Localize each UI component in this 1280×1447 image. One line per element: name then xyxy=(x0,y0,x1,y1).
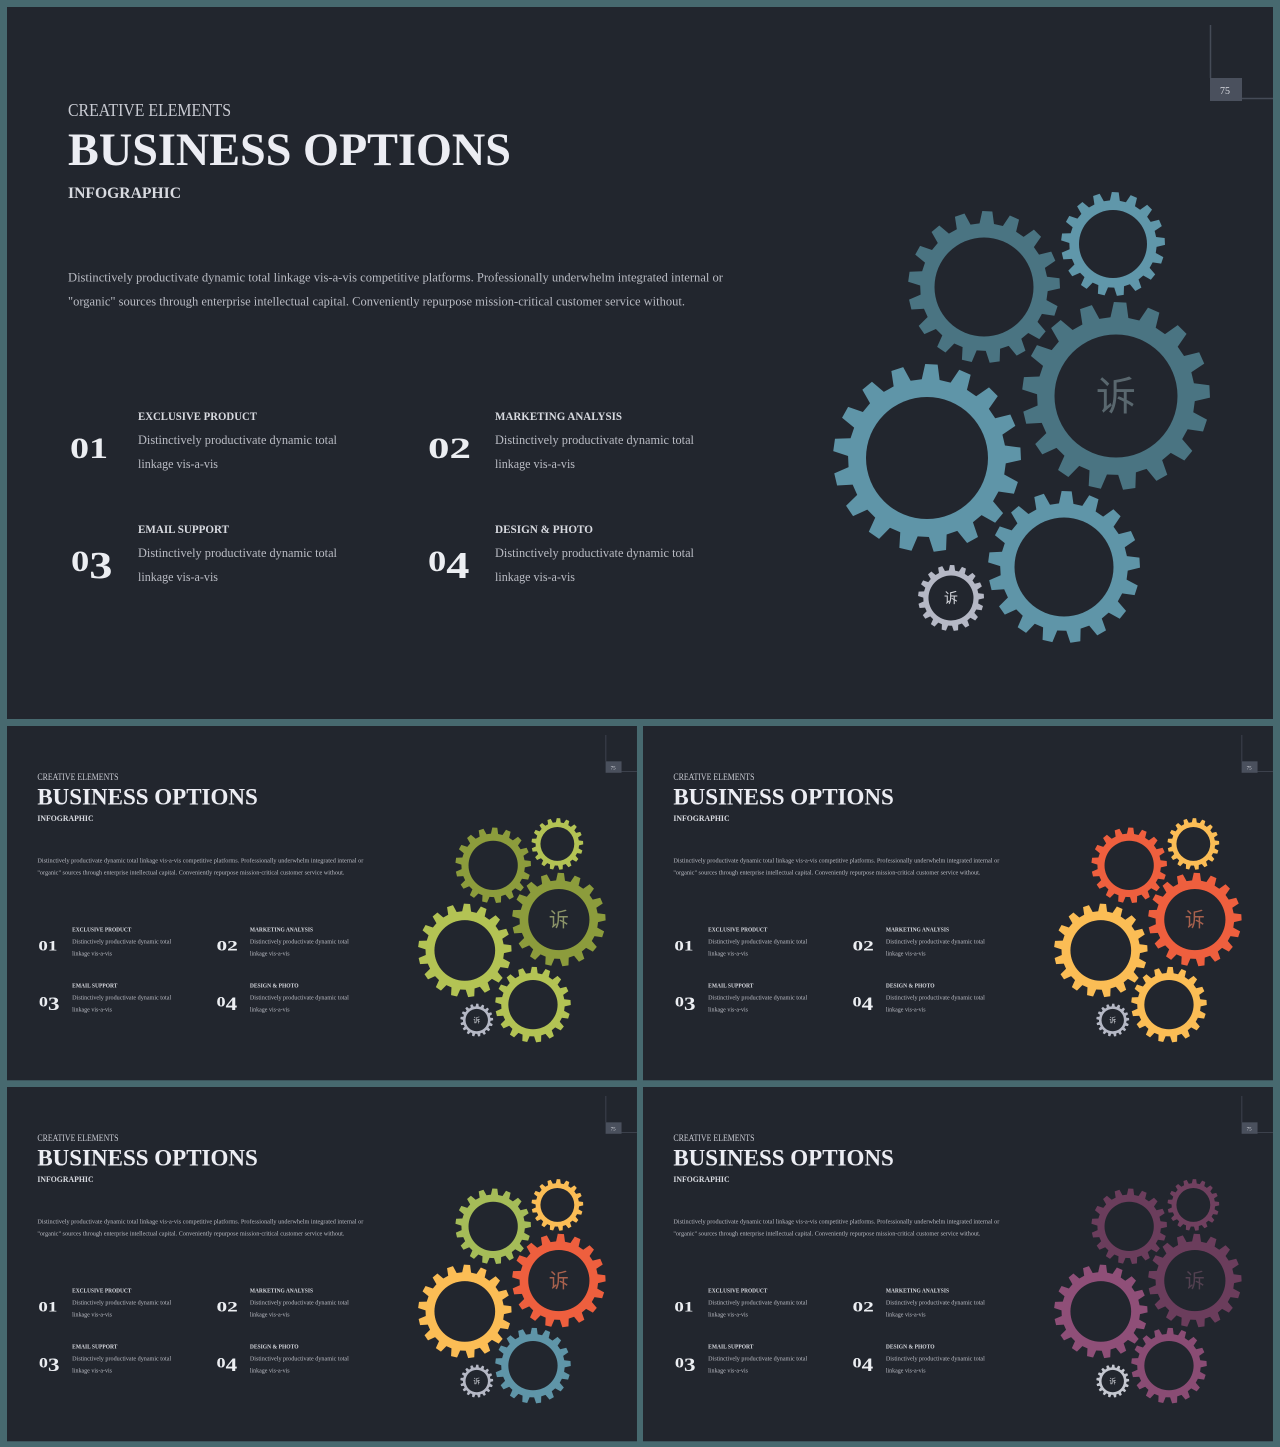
title block: INFOGRAPHIC xyxy=(37,814,94,823)
page number tab: 75 xyxy=(1220,86,1230,97)
item 03: 3 xyxy=(48,993,59,1015)
item 02: Distinctively productivate dynamic total xyxy=(886,938,985,945)
gear: small grey with glyph: 诉 xyxy=(944,590,958,606)
gear: small grey with glyph xyxy=(460,1003,494,1037)
item 01: linkage vis-a-vis xyxy=(72,950,112,957)
item 02: Distinctively productivate dynamic total xyxy=(250,938,349,945)
page number tab xyxy=(1210,25,1273,101)
item 04: Distinctively productivate dynamic total xyxy=(250,1356,349,1363)
item 01: EXCLUSIVE PRODUCT xyxy=(138,409,257,423)
item 02: 02 xyxy=(428,432,471,465)
title block: CREATIVE ELEMENTS xyxy=(68,100,231,120)
item 04: DESIGN & PHOTO xyxy=(886,1345,935,1351)
item 03: EMAIL SUPPORT xyxy=(72,1345,117,1351)
gear: small grey with glyph: 诉 xyxy=(473,1377,480,1386)
item 04: 0 xyxy=(852,1354,862,1371)
title block: BUSINESS OPTIONS xyxy=(673,1146,894,1172)
item 03: 0 xyxy=(675,993,684,1010)
gear: small grey with glyph xyxy=(1096,1003,1130,1037)
item 01: Distinctively productivate dynamic total xyxy=(138,432,337,447)
item 03: 3 xyxy=(684,1354,695,1376)
gear: small grey with glyph xyxy=(917,564,985,632)
item 01: 01 xyxy=(70,432,108,465)
gear: top right xyxy=(530,817,584,871)
panel background xyxy=(643,1087,1273,1441)
intro paragraph xyxy=(37,1219,364,1238)
item 03 xyxy=(675,984,807,1015)
item 03: 0 xyxy=(39,993,48,1010)
intro paragraph: Distinctively productivate dynamic total linkage vis-a-vis competitive platforms. Professionally underwhelm integrated internal or xyxy=(673,858,1000,865)
item 04: Distinctively productivate dynamic total xyxy=(886,1356,985,1363)
item 01: Distinctively productivate dynamic total xyxy=(72,1299,171,1306)
item 03: Distinctively productivate dynamic total xyxy=(138,545,337,560)
gear: top right xyxy=(1059,190,1167,298)
intro paragraph: "organic" sources through enterprise intellectual capital. Conveniently repurpose mission-critical customer service without. xyxy=(673,870,981,877)
gear: top left xyxy=(905,208,1063,366)
intro paragraph xyxy=(37,858,364,877)
item 02: 02 xyxy=(216,1298,238,1315)
item 04: 4 xyxy=(862,1354,874,1376)
title block: BUSINESS OPTIONS xyxy=(37,785,258,811)
title block: BUSINESS OPTIONS xyxy=(68,124,511,176)
item 03: 0 xyxy=(71,545,89,578)
item 02 xyxy=(216,928,349,957)
panel background xyxy=(7,1087,637,1441)
item 04 xyxy=(852,984,985,1015)
page number tab xyxy=(606,735,637,773)
gear: right with glyph: 诉 xyxy=(1185,909,1205,932)
item 02: MARKETING ANALYSIS xyxy=(886,1289,950,1295)
item 04: linkage vis-a-vis xyxy=(250,1007,290,1014)
item 02: Distinctively productivate dynamic total xyxy=(495,432,694,447)
intro paragraph: Distinctively productivate dynamic total linkage vis-a-vis competitive platforms. Professionally underwhelm integrated internal or xyxy=(68,270,724,284)
item 01 xyxy=(674,1289,807,1318)
item 01: linkage vis-a-vis xyxy=(138,456,218,471)
item 03: 0 xyxy=(675,1354,684,1371)
title block: CREATIVE ELEMENTS xyxy=(37,1133,118,1143)
page number tab: 75 xyxy=(1247,766,1252,771)
item 04: 0 xyxy=(216,993,226,1010)
panel: purple gears variant xyxy=(643,1087,1273,1441)
gear: small grey with glyph: 诉 xyxy=(1109,1016,1116,1025)
title block: INFOGRAPHIC xyxy=(68,185,181,202)
gear: large left xyxy=(1052,902,1150,999)
page number tab xyxy=(606,1096,637,1134)
title block: INFOGRAPHIC xyxy=(37,1175,94,1184)
item 03: linkage vis-a-vis xyxy=(72,1007,112,1014)
item 04: Distinctively productivate dynamic total xyxy=(495,545,694,560)
intro paragraph: "organic" sources through enterprise intellectual capital. Conveniently repurpose mission-critical customer service without. xyxy=(673,1231,981,1238)
gear: top right xyxy=(1166,1178,1220,1232)
panel background xyxy=(643,726,1273,1080)
item 04: 0 xyxy=(216,1354,226,1371)
intro paragraph: Distinctively productivate dynamic total linkage vis-a-vis competitive platforms. Professionally underwhelm integrated internal or xyxy=(673,1219,1000,1226)
gear: top left xyxy=(1090,826,1169,904)
item 04: 0 xyxy=(852,993,862,1010)
item 01 xyxy=(38,1289,171,1318)
item 02: linkage vis-a-vis xyxy=(495,456,575,471)
item 03 xyxy=(71,522,337,587)
item 01: Distinctively productivate dynamic total xyxy=(72,938,171,945)
intro paragraph: "organic" sources through enterprise intellectual capital. Conveniently repurpose mission-critical customer service without. xyxy=(37,1231,345,1238)
item 03: EMAIL SUPPORT xyxy=(708,1345,753,1351)
item 03 xyxy=(39,1345,171,1376)
item 03: 3 xyxy=(684,993,695,1015)
intro paragraph xyxy=(68,270,724,308)
gear: top right xyxy=(1166,817,1220,871)
title block: CREATIVE ELEMENTS xyxy=(37,772,118,782)
item 01: EXCLUSIVE PRODUCT xyxy=(72,928,131,934)
gear: right with glyph: 诉 xyxy=(1096,375,1136,419)
intro paragraph: "organic" sources through enterprise intellectual capital. Conveniently repurpose mission-critical customer service without. xyxy=(37,870,345,877)
gear cluster xyxy=(416,1178,608,1405)
item 01: EXCLUSIVE PRODUCT xyxy=(708,928,767,934)
gear: right with glyph xyxy=(510,1232,608,1329)
gear: right with glyph: 诉 xyxy=(1185,1270,1205,1293)
gear: large left xyxy=(416,902,514,999)
item 01: 01 xyxy=(674,1298,693,1315)
item 03: linkage vis-a-vis xyxy=(708,1368,748,1375)
title block xyxy=(673,772,894,823)
panel: main slide, blue gears xyxy=(7,7,1273,719)
item 04: 4 xyxy=(226,993,238,1015)
title block xyxy=(68,100,511,202)
title block: BUSINESS OPTIONS xyxy=(673,785,894,811)
gear: bottom xyxy=(494,1327,572,1405)
gear cluster xyxy=(1052,817,1244,1044)
item 04: 4 xyxy=(862,993,874,1015)
item 02: Distinctively productivate dynamic total xyxy=(250,1299,349,1306)
item 03: Distinctively productivate dynamic total xyxy=(72,995,171,1002)
gear: right with glyph xyxy=(1018,298,1214,493)
item 01: 01 xyxy=(38,1298,57,1315)
item 02: 02 xyxy=(852,1298,874,1315)
item 03: EMAIL SUPPORT xyxy=(138,522,229,536)
intro paragraph xyxy=(673,1219,1000,1238)
item 02: linkage vis-a-vis xyxy=(250,950,290,957)
item 02 xyxy=(852,1289,985,1318)
gear cluster xyxy=(416,817,608,1044)
gear: large left xyxy=(416,1263,514,1360)
item 01 xyxy=(70,409,337,471)
item 02: Distinctively productivate dynamic total xyxy=(886,1299,985,1306)
title block: INFOGRAPHIC xyxy=(673,814,730,823)
item 01: Distinctively productivate dynamic total xyxy=(708,938,807,945)
gear: small grey with glyph xyxy=(1096,1364,1130,1398)
gear: right with glyph: 诉 xyxy=(549,909,569,932)
item 01: Distinctively productivate dynamic total xyxy=(708,1299,807,1306)
gear: small grey with glyph xyxy=(460,1364,494,1398)
page number tab xyxy=(1242,1096,1273,1134)
title block xyxy=(37,772,258,823)
item 03: Distinctively productivate dynamic total xyxy=(708,995,807,1002)
item 02: linkage vis-a-vis xyxy=(886,1311,926,1318)
gear: right with glyph: 诉 xyxy=(549,1270,569,1293)
item 02: linkage vis-a-vis xyxy=(250,1311,290,1318)
panel: olive gears variant xyxy=(7,726,637,1080)
item 04: DESIGN & PHOTO xyxy=(495,522,593,536)
item 04 xyxy=(852,1345,985,1376)
gear: right with glyph xyxy=(1146,1232,1244,1329)
item 03: linkage vis-a-vis xyxy=(138,569,218,584)
gear: large left xyxy=(829,360,1025,556)
gear: small grey with glyph: 诉 xyxy=(473,1016,480,1025)
item 01 xyxy=(674,928,807,957)
gear: bottom xyxy=(985,489,1143,645)
gear: small grey with glyph: 诉 xyxy=(1109,1377,1116,1386)
gear: right with glyph xyxy=(510,871,608,968)
item 02 xyxy=(216,1289,349,1318)
gear: bottom xyxy=(1130,1327,1208,1405)
item 03: EMAIL SUPPORT xyxy=(72,984,117,990)
gear cluster xyxy=(829,190,1214,645)
item 03: linkage vis-a-vis xyxy=(72,1368,112,1375)
item 01: 01 xyxy=(38,937,57,954)
item 03: 3 xyxy=(89,545,112,587)
page number tab: 75 xyxy=(1247,1127,1252,1132)
title block xyxy=(37,1133,258,1184)
item 01: EXCLUSIVE PRODUCT xyxy=(708,1289,767,1295)
item 01: linkage vis-a-vis xyxy=(708,1311,748,1318)
page number tab xyxy=(1242,735,1273,773)
title block xyxy=(673,1133,894,1184)
page number tab: 75 xyxy=(611,1127,616,1132)
item 02: linkage vis-a-vis xyxy=(886,950,926,957)
item 02: MARKETING ANALYSIS xyxy=(250,1289,314,1295)
gear: large left xyxy=(1052,1263,1150,1360)
item 04: linkage vis-a-vis xyxy=(886,1007,926,1014)
panel: orange and yellow gears variant xyxy=(643,726,1273,1080)
item 04 xyxy=(216,1345,349,1376)
item 03: EMAIL SUPPORT xyxy=(708,984,753,990)
gear: bottom xyxy=(1130,966,1208,1044)
gear: bottom xyxy=(494,966,572,1044)
panel background xyxy=(7,726,637,1080)
intro paragraph: "organic" sources through enterprise intellectual capital. Conveniently repurpose mission-critical customer service without. xyxy=(68,294,685,308)
item 01 xyxy=(38,928,171,957)
item 04: linkage vis-a-vis xyxy=(250,1368,290,1375)
item 02: 02 xyxy=(852,937,874,954)
item 01: EXCLUSIVE PRODUCT xyxy=(72,1289,131,1295)
item 03: 3 xyxy=(48,1354,59,1376)
item 04: linkage vis-a-vis xyxy=(495,569,575,584)
item 03: Distinctively productivate dynamic total xyxy=(708,1356,807,1363)
item 02 xyxy=(852,928,985,957)
item 04: DESIGN & PHOTO xyxy=(250,984,299,990)
item 02 xyxy=(428,409,694,471)
item 04: Distinctively productivate dynamic total xyxy=(886,995,985,1002)
item 04: Distinctively productivate dynamic total xyxy=(250,995,349,1002)
panel background xyxy=(7,7,1273,719)
panel: multicolour gears variant xyxy=(7,1087,637,1441)
item 03 xyxy=(675,1345,807,1376)
gear: top left xyxy=(454,826,533,904)
gear: right with glyph xyxy=(1146,871,1244,968)
gear cluster xyxy=(1052,1178,1244,1405)
title block: BUSINESS OPTIONS xyxy=(37,1146,258,1172)
intro paragraph: Distinctively productivate dynamic total linkage vis-a-vis competitive platforms. Professionally underwhelm integrated internal or xyxy=(37,858,364,865)
item 03: linkage vis-a-vis xyxy=(708,1007,748,1014)
item 03: 0 xyxy=(39,1354,48,1371)
item 04 xyxy=(216,984,349,1015)
item 02: 02 xyxy=(216,937,238,954)
item 04: 4 xyxy=(446,545,469,587)
item 03 xyxy=(39,984,171,1015)
item 04: 4 xyxy=(226,1354,238,1376)
item 04: linkage vis-a-vis xyxy=(886,1368,926,1375)
gear: top left xyxy=(1090,1187,1169,1265)
item 04: DESIGN & PHOTO xyxy=(886,984,935,990)
item 02: MARKETING ANALYSIS xyxy=(495,409,622,423)
item 02: MARKETING ANALYSIS xyxy=(250,928,314,934)
intro paragraph xyxy=(673,858,1000,877)
intro paragraph: Distinctively productivate dynamic total linkage vis-a-vis competitive platforms. Professionally underwhelm integrated internal or xyxy=(37,1219,364,1226)
gear: top right xyxy=(530,1178,584,1232)
title block: CREATIVE ELEMENTS xyxy=(673,1133,754,1143)
item 03: Distinctively productivate dynamic total xyxy=(72,1356,171,1363)
title block: CREATIVE ELEMENTS xyxy=(673,772,754,782)
gear: top left xyxy=(454,1187,533,1265)
item 04: 0 xyxy=(428,545,446,578)
item 04 xyxy=(428,522,694,587)
title block: INFOGRAPHIC xyxy=(673,1175,730,1184)
item 01: linkage vis-a-vis xyxy=(708,950,748,957)
page number tab: 75 xyxy=(611,766,616,771)
item 01: linkage vis-a-vis xyxy=(72,1311,112,1318)
item 01: 01 xyxy=(674,937,693,954)
item 04: DESIGN & PHOTO xyxy=(250,1345,299,1351)
item 02: MARKETING ANALYSIS xyxy=(886,928,950,934)
